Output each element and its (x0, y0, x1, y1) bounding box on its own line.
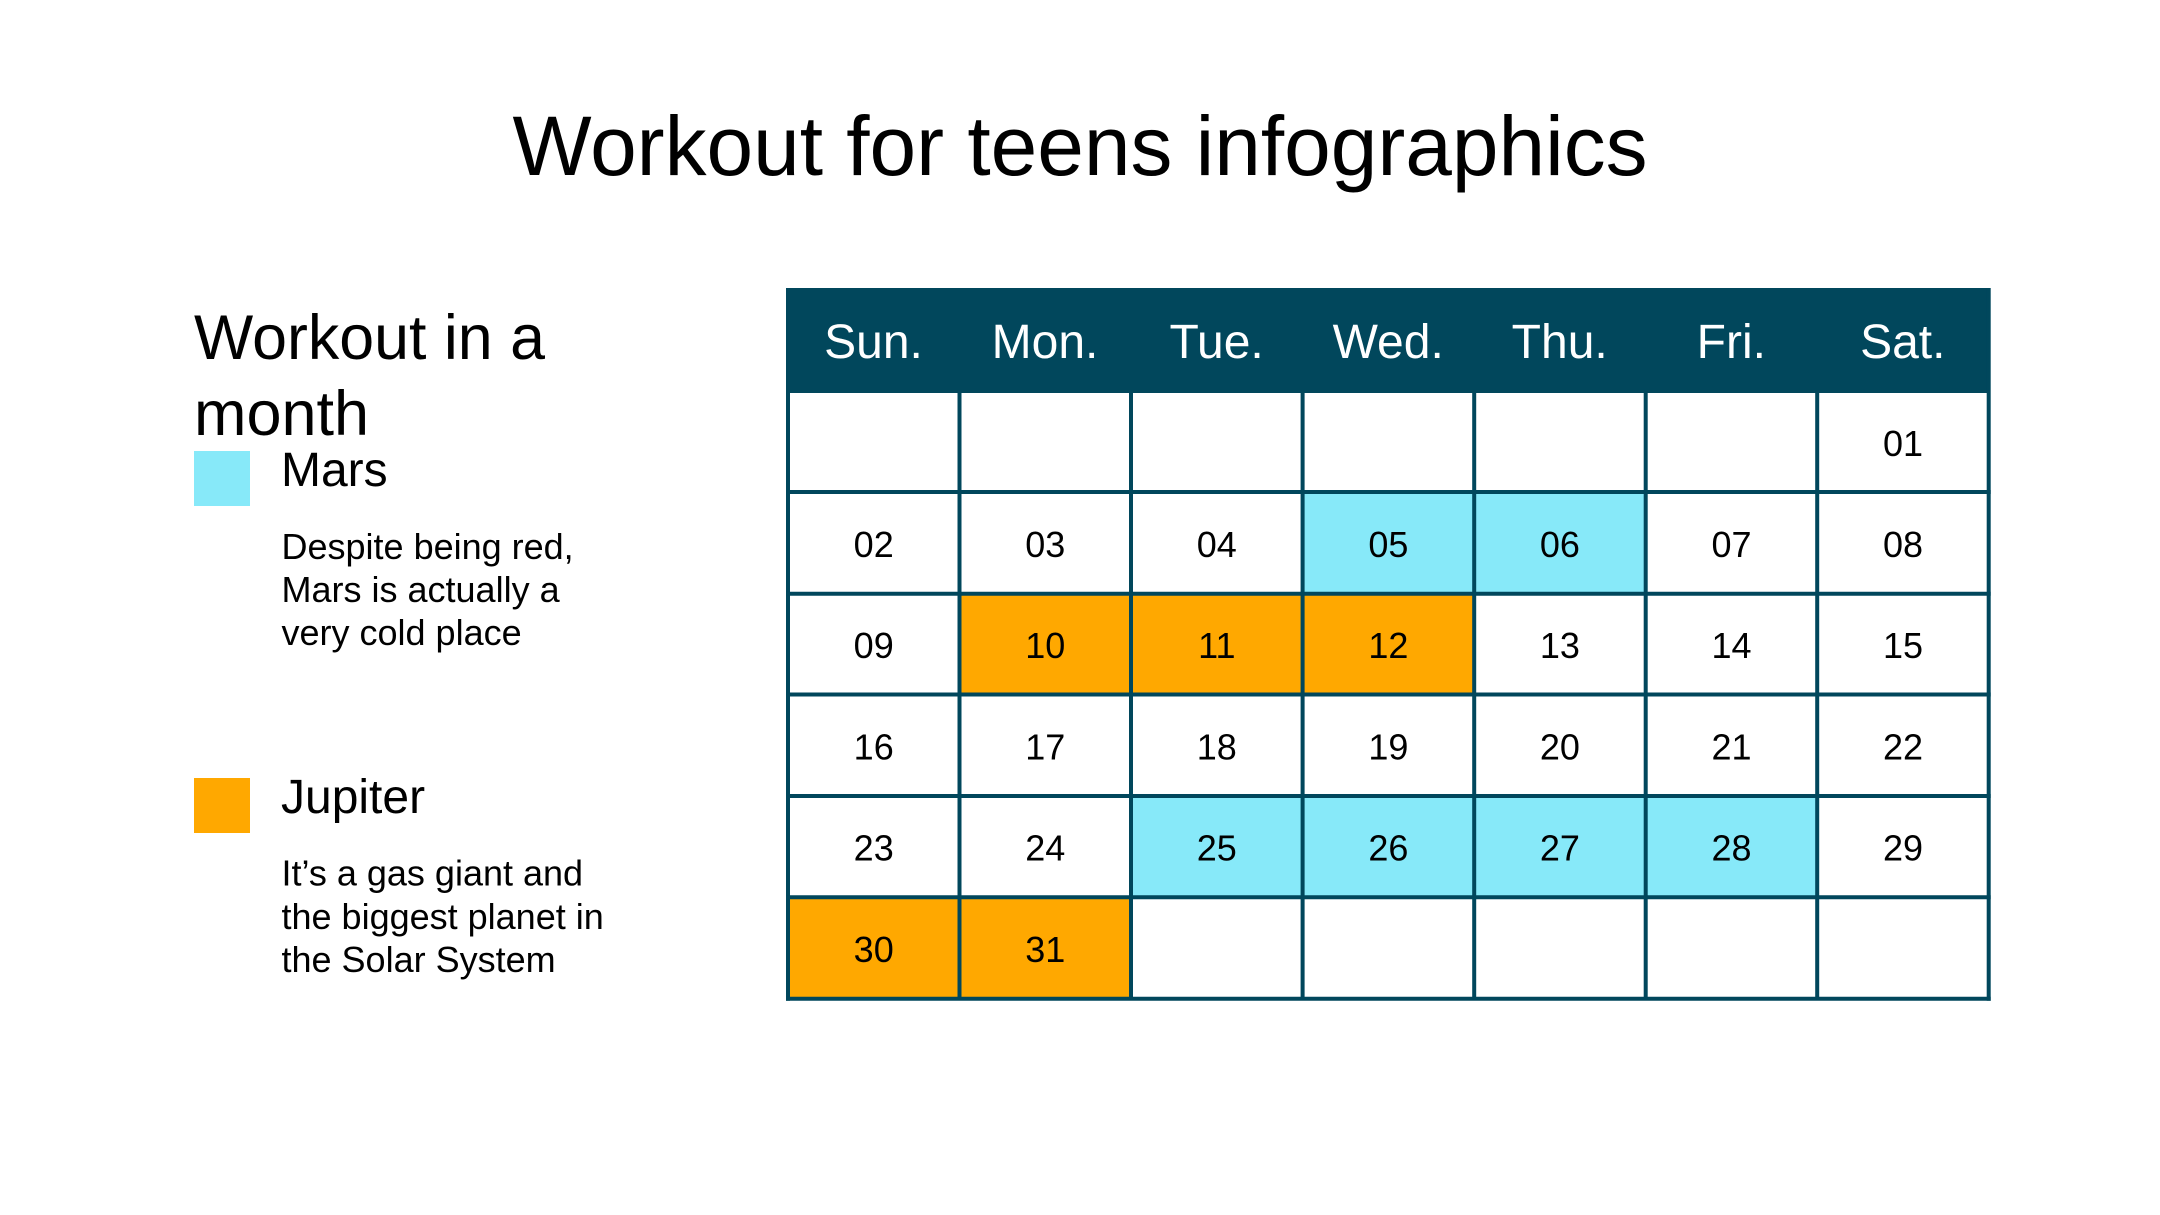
calendar day numbers: 06 (1540, 524, 1580, 565)
calendar day numbers: 25 (1197, 828, 1237, 869)
calendar day numbers: 02 (854, 524, 894, 565)
calendar day numbers: 27 (1540, 828, 1580, 869)
calendar day numbers: 05 (1368, 524, 1408, 565)
text: Mars description: Mars is actually a (282, 569, 561, 610)
calendar day numbers: 30 (854, 929, 894, 970)
calendar day numbers: 29 (1883, 828, 1923, 869)
calendar header row: Sat. (1860, 316, 1945, 369)
calendar day numbers (854, 423, 1923, 970)
calendar day numbers: 12 (1368, 625, 1408, 666)
label: Jupiter: Jupiter (281, 771, 425, 824)
highlighted days: Jupiter (788, 594, 1474, 999)
calendar day numbers: 19 (1368, 726, 1408, 768)
calendar day numbers: 26 (1368, 828, 1408, 869)
calendar day numbers: 03 (1025, 524, 1065, 565)
calendar day numbers: 23 (854, 828, 894, 869)
highlighted days: Mars (1131, 492, 1817, 897)
calendar grid lines (786, 288, 1991, 1001)
calendar day numbers: 22 (1883, 726, 1923, 768)
calendar day numbers: 21 (1711, 726, 1752, 768)
text: Jupiter description (282, 852, 604, 980)
calendar day numbers: 04 (1197, 524, 1237, 565)
calendar day numbers: 15 (1883, 625, 1923, 666)
calendar header row: Mon. (992, 316, 1098, 369)
legend: Jupiter (194, 771, 604, 980)
heading: workout in a month: month (194, 379, 369, 449)
calendar day numbers: 13 (1540, 625, 1580, 666)
legend: Mars (194, 444, 574, 653)
calendar day numbers: 14 (1711, 625, 1752, 666)
calendar table (786, 288, 1991, 1001)
calendar header row: Wed. (1333, 316, 1444, 369)
calendar day numbers: 28 (1711, 828, 1752, 869)
calendar day numbers: 31 (1025, 929, 1065, 970)
title: Workout for teens infographics (512, 99, 1648, 193)
calendar header row (786, 288, 1990, 393)
calendar day numbers: 24 (1025, 828, 1065, 869)
text: Jupiter description: the biggest planet in (282, 896, 604, 937)
icon: Jupiter colour swatch (194, 778, 250, 833)
calendar day numbers: 11 (1198, 625, 1235, 666)
calendar header row: Tue. (1169, 316, 1264, 369)
text: Mars description: Despite being red, (282, 526, 574, 567)
icon: Mars colour swatch (194, 451, 250, 506)
calendar header row: Fri. (1697, 316, 1766, 369)
label: Mars: Mars (281, 444, 388, 497)
calendar header row: Sun. (824, 316, 923, 369)
calendar day numbers: 01 (1883, 423, 1923, 464)
calendar day numbers: 18 (1197, 726, 1237, 768)
text: Jupiter description: It’s a gas giant and (282, 852, 583, 894)
calendar header row: Thu. (1512, 316, 1608, 369)
calendar day numbers: 10 (1025, 625, 1065, 666)
text: Mars description: very cold place (282, 612, 522, 653)
calendar day numbers: 08 (1883, 524, 1923, 565)
calendar day numbers: 17 (1025, 726, 1065, 768)
calendar day numbers: 07 (1711, 524, 1752, 565)
heading: workout in a month (194, 303, 546, 449)
heading: workout in a month: Workout in a (194, 303, 546, 373)
calendar day numbers: 20 (1540, 726, 1580, 768)
text: Mars description (282, 526, 574, 653)
calendar day numbers: 09 (854, 625, 894, 666)
calendar day numbers: 16 (854, 726, 894, 768)
text: Jupiter description: the Solar System (282, 939, 556, 980)
